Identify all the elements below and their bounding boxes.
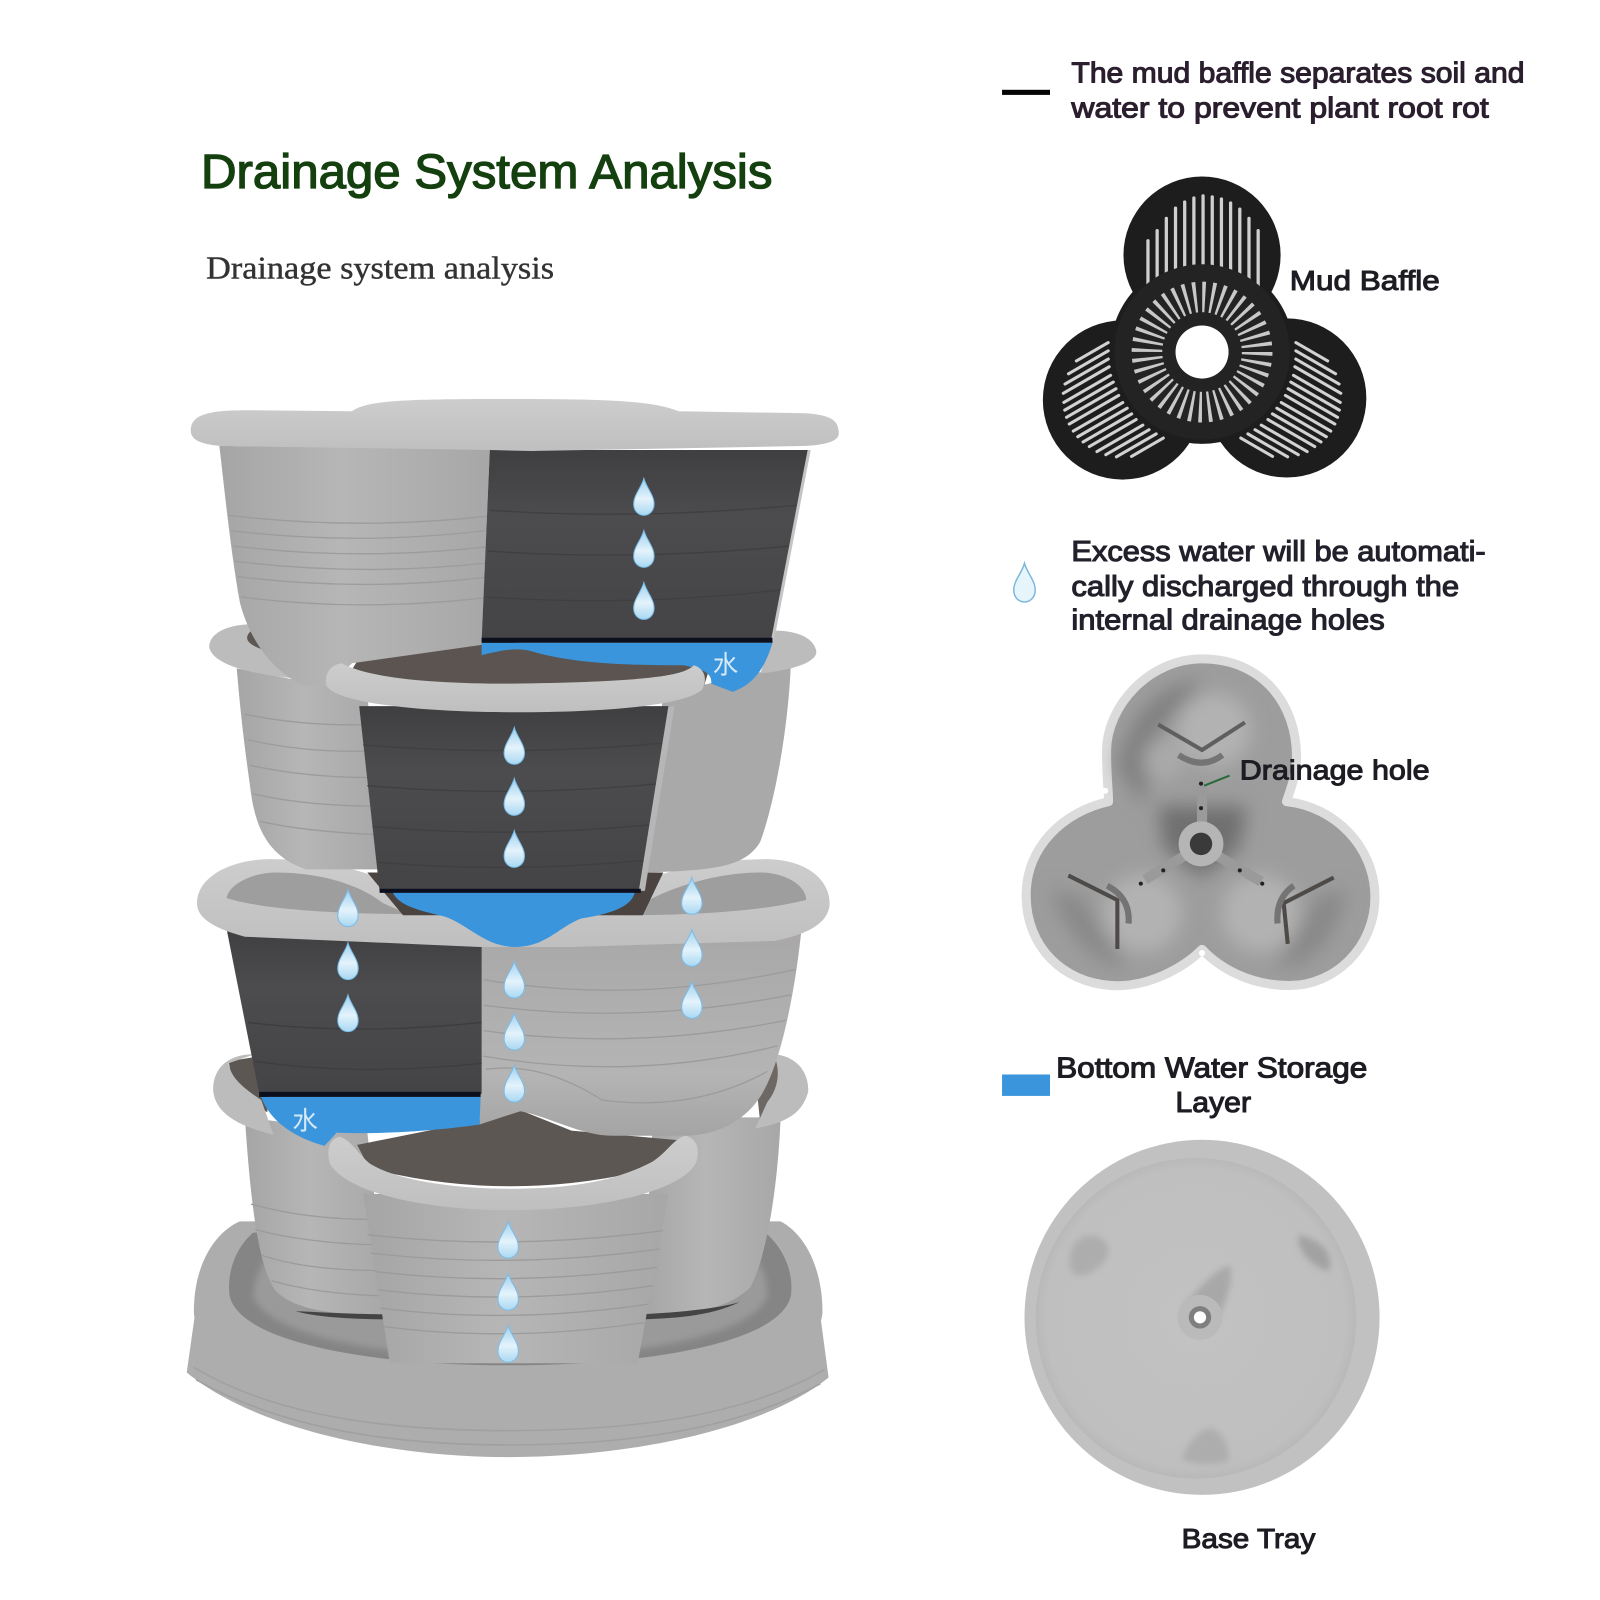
second tier: back pots and rim: [209, 624, 816, 872]
text: excess water description: cally discharged through the: [1071, 571, 1459, 603]
water character: top tier: 水: [713, 651, 738, 679]
text: mud baffle description: water to prevent plant root rot: [1070, 92, 1489, 124]
text: water storage description: Layer: [1176, 1087, 1252, 1119]
label: base tray: Base Tray: [1182, 1523, 1316, 1554]
bottom tier: front light pot: [328, 1110, 698, 1363]
title: Drainage System Analysis: [201, 146, 772, 199]
third tier: left dark cutaway pot: [227, 929, 482, 1146]
water drops falling through the tiers: [338, 479, 702, 1362]
legend: mud baffle line: [1002, 90, 1050, 95]
top tier: right dark cutaway pot: [482, 450, 809, 692]
second tier: interior behind water layer: [342, 641, 714, 686]
icon: mud baffle part: [1043, 177, 1366, 480]
bottom tier: back pots and rim: [213, 1054, 808, 1319]
water character: third tier: 水: [292, 1108, 318, 1136]
top tier: rim: [191, 399, 839, 451]
third tier: right light pot: [480, 934, 801, 1136]
blue water layer: top tier: [482, 643, 772, 692]
base tray: [187, 1221, 829, 1457]
text: excess water description: Excess water will be automati-: [1071, 536, 1486, 568]
subtitle: Drainage system analysis: [206, 251, 554, 286]
icon: planter interior with drainage holes: [1026, 659, 1375, 986]
blue water layer: second tier: [393, 893, 635, 947]
blue water layer: third tier: [261, 1097, 481, 1146]
arrow: drainage hole pointer: [1204, 776, 1230, 786]
icon: base tray underside: [1024, 1140, 1380, 1495]
second tier: front dark cutaway pot: [326, 663, 705, 947]
interior shading: [1051, 681, 1347, 969]
label: mud baffle: Mud Baffle: [1290, 265, 1440, 296]
third tier: rim and interior: [197, 859, 830, 947]
text: mud baffle description: The mud baffle separates soil and: [1071, 58, 1524, 90]
text: water storage description: Bottom Water Storage: [1056, 1053, 1367, 1085]
label: drainage hole: Drainage hole: [1240, 755, 1430, 786]
second tier: rim: [326, 663, 705, 712]
text: excess water description: internal drainage holes: [1071, 605, 1385, 637]
top tier: left light pot: [219, 446, 490, 686]
legend: water drop icon: [1014, 563, 1035, 602]
stacked planter cutaway illustration: [187, 399, 839, 1457]
legend: water storage swatch: [1002, 1074, 1050, 1096]
